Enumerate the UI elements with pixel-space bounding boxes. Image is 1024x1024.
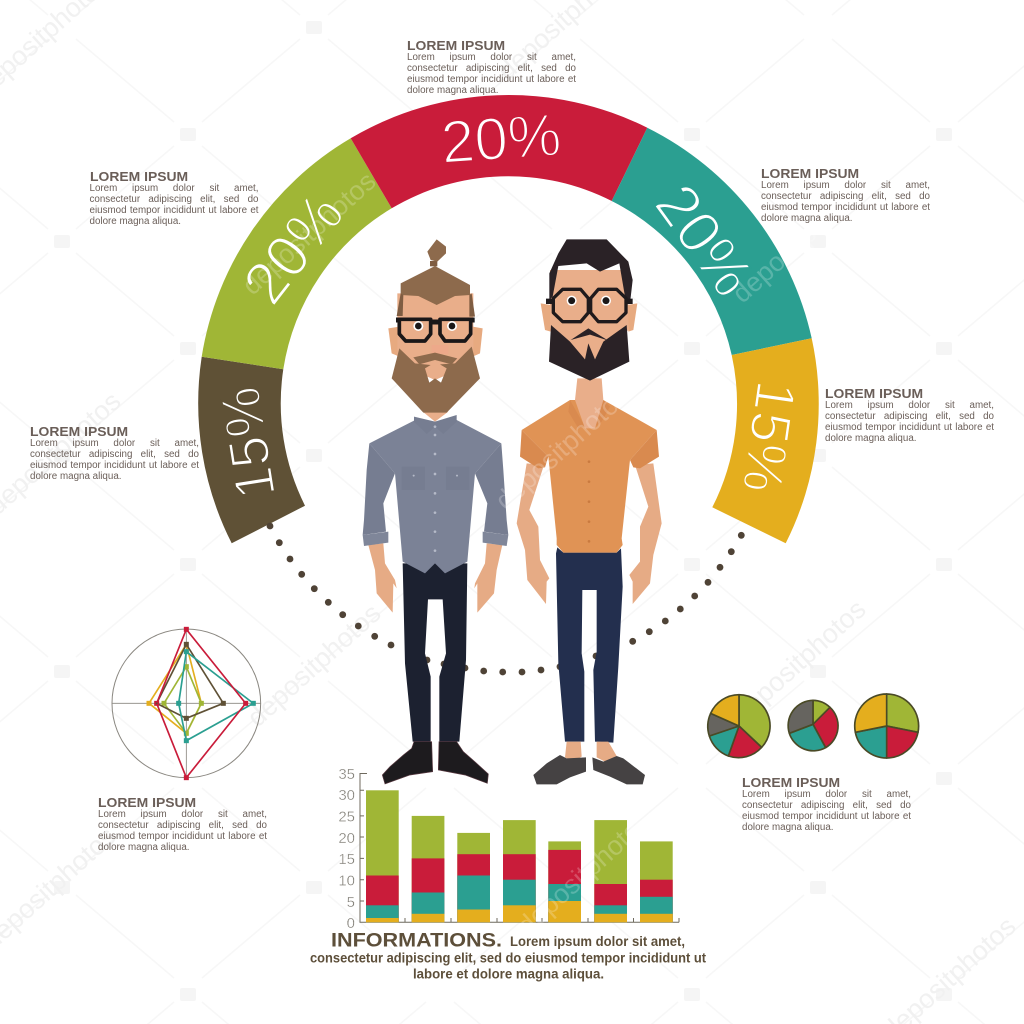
informations paragraph: labore et dolore magna aliqua. [413, 966, 604, 982]
ring segment: brown 15% [198, 357, 305, 543]
trousers [403, 563, 467, 742]
text block: radar caption [98, 795, 267, 853]
bar 3 [457, 833, 490, 922]
text block: left [30, 424, 199, 482]
ring segment: red 20% [351, 95, 647, 208]
text block: upper left [90, 169, 258, 227]
glasses [396, 319, 475, 341]
bar 5 [548, 841, 581, 922]
text block: top: eiusmod tempor incididunt ut labore et [407, 74, 576, 85]
series: teal [177, 650, 255, 742]
text block: right: LOREM IPSUM [825, 386, 923, 401]
neck [423, 412, 448, 422]
text block: radar caption: LOREM IPSUM [98, 795, 196, 810]
text block: radar caption: consectetur adipiscing elit, sed do [98, 820, 267, 831]
axis labels: 10 [338, 872, 355, 890]
axes [360, 774, 679, 922]
ankles [565, 742, 617, 762]
ring segment: teal 20% [612, 128, 812, 355]
neck [575, 378, 603, 428]
text block: upper right [761, 166, 930, 224]
text block: upper right: LOREM IPSUM [761, 166, 859, 181]
text block: pie caption [742, 775, 911, 833]
stacked bar chart [338, 766, 679, 932]
trousers [556, 547, 623, 743]
axis labels: 0 [347, 915, 355, 932]
text block: upper right: consectetur adipiscing elit, sed do [761, 191, 930, 202]
bar 1 [366, 790, 399, 922]
text block: pie caption: LOREM IPSUM [742, 775, 840, 790]
informations paragraph [310, 930, 706, 982]
figure: man with bun and brown beard [363, 239, 508, 784]
axis labels: 25 [338, 808, 355, 826]
axis labels: 15 [338, 851, 355, 868]
bar 6 [594, 820, 627, 922]
dotted arc [267, 523, 745, 675]
text block: upper left: LOREM IPSUM [90, 169, 188, 184]
axis labels [338, 766, 355, 932]
ring segment: yellow 15%: 15% [731, 377, 808, 497]
text block: right [825, 386, 994, 444]
text block: upper left: Lorem ipsum dolor sit amet, [90, 183, 258, 194]
text block: radar caption: dolore magna aliqua. [98, 842, 190, 853]
text block: top: consectetur adipiscing elit, sed do [407, 63, 576, 74]
arms [368, 543, 502, 613]
bar 7 [640, 841, 673, 922]
text block: top: dolore magna aliqua. [407, 85, 499, 96]
series: yellow [147, 644, 201, 733]
pie 3 [855, 694, 919, 758]
pie 1 [708, 695, 770, 758]
bar 2 [412, 816, 444, 922]
boots [382, 742, 488, 784]
axis labels: 20 [338, 830, 355, 847]
ring segment: yellow 15% [712, 338, 819, 543]
series: brown [157, 643, 225, 720]
text: depositphotos [241, 598, 386, 733]
text block: pie caption: dolore magna aliqua. [742, 822, 834, 833]
informations paragraph: INFORMATIONS. [331, 930, 502, 952]
text block: pie caption: Lorem ipsum dolor sit amet, [742, 789, 911, 800]
pie 2 [788, 700, 838, 751]
arms [517, 463, 662, 604]
figure: man with black beard [517, 239, 662, 784]
text block: radar caption: Lorem ipsum dolor sit amet, [98, 809, 267, 820]
text block: pie caption: eiusmod tempor incididunt ut labore et [742, 811, 911, 822]
hair [549, 239, 633, 303]
text block: upper left: consectetur adipiscing elit, sed do [90, 194, 258, 205]
beard [549, 325, 629, 381]
series: green [162, 665, 203, 735]
text block: top [407, 38, 576, 96]
moustache [571, 328, 608, 341]
text block: left: consectetur adipiscing elit, sed do [30, 449, 199, 460]
text block: radar caption: eiusmod tempor incididunt ut labore et [98, 831, 267, 842]
ring chart [198, 95, 819, 543]
ring segment: red 20%: 20% [439, 101, 563, 176]
hair bun [427, 239, 446, 262]
text: depositphotos [726, 174, 871, 309]
informations paragraph: Lorem ipsum dolor sit amet, [510, 934, 685, 949]
text block: left: dolore magna aliqua. [30, 471, 122, 482]
text: depositphotos [236, 166, 381, 301]
beard [392, 347, 480, 413]
text block: left: eiusmod tempor incididunt ut labore et [30, 460, 199, 471]
text block: upper left: eiusmod tempor incididunt ut labore et [90, 205, 258, 216]
glasses [546, 289, 633, 322]
radar chart [112, 628, 261, 779]
ears [388, 327, 483, 357]
ring segment: brown 15%: 15% [208, 383, 287, 503]
bar 4 [503, 820, 536, 922]
eyes [413, 321, 457, 331]
text: depositphotos [511, 806, 656, 941]
informations paragraph: consectetur adipiscing elit, sed do eiusmod tempor incididunt ut [310, 950, 706, 966]
axis labels: 35 [338, 766, 355, 783]
text: depositphotos [489, 381, 634, 516]
ring segment: teal 20%: 20% [642, 172, 767, 309]
text block: right: consectetur adipiscing elit, sed do [825, 411, 994, 422]
pie charts [708, 694, 919, 758]
text block: right: Lorem ipsum dolor sit amet, [825, 400, 994, 411]
text: depositphotos [726, 594, 871, 729]
shirt [522, 400, 657, 553]
ring segment: green 20% [202, 138, 392, 369]
face [397, 293, 473, 380]
text block: right: dolore magna aliqua. [825, 433, 917, 444]
text block: upper left: dolore magna aliqua. [90, 216, 181, 227]
hair [401, 266, 470, 305]
axis labels: 5 [347, 894, 355, 911]
series: red [155, 628, 247, 779]
shoes [533, 755, 645, 784]
text block: upper right: Lorem ipsum dolor sit amet, [761, 180, 930, 191]
ears [541, 303, 637, 332]
axis labels: 30 [338, 787, 355, 804]
text block: upper right: eiusmod tempor incididunt ut labore et [761, 202, 930, 213]
ring segment: green 20%: 20% [230, 180, 357, 316]
text block: top: LOREM IPSUM [407, 38, 505, 53]
moustache [413, 353, 457, 364]
face [550, 270, 628, 363]
text block: upper right: dolore magna aliqua. [761, 213, 853, 224]
eyes [567, 296, 611, 306]
text block: right: eiusmod tempor incididunt ut labore et [825, 422, 994, 433]
shirt [369, 420, 501, 573]
text block: top: Lorem ipsum dolor sit amet, [407, 52, 576, 63]
text block: pie caption: consectetur adipiscing elit, sed do [742, 800, 911, 811]
text block: left: LOREM IPSUM [30, 424, 128, 439]
text block: left: Lorem ipsum dolor sit amet, [30, 438, 199, 449]
